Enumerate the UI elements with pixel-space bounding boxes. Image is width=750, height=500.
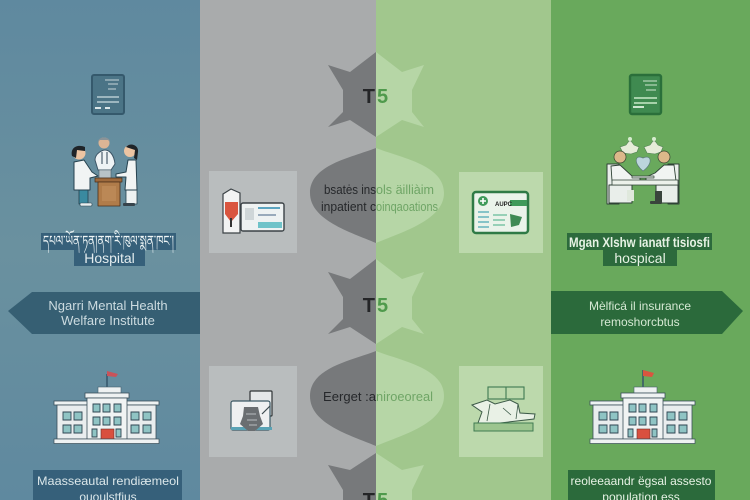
- icon: left document: [92, 75, 124, 114]
- icon: medical staff at podium: [72, 138, 138, 206]
- text: inpatient conditions: bsatės ins: [324, 183, 376, 197]
- panel: left blue column: [0, 0, 200, 500]
- heading: right hospital label: Mgan Xlshw ianatf tisiosfi: [569, 234, 710, 250]
- caption: left bottom label: [33, 470, 182, 500]
- caption: left bottom label: Maasseautal rendiæmeol: [37, 474, 179, 488]
- text: inpatient conditions: ols äilliàim: [376, 183, 434, 197]
- panel: right green column: [551, 0, 750, 500]
- card: patient on bed icon: [459, 366, 543, 457]
- text: inpatient conditions: [321, 183, 438, 214]
- caption: right bottom label: [568, 470, 715, 500]
- label: T5 top: T: [363, 86, 375, 108]
- panel: centre-right light green column: [376, 0, 551, 500]
- text: eerget: Eerget :a: [323, 390, 376, 404]
- heading: left hospital label: དཔལ་ཡོན་ཏན།ནག་རི་ཁུལ་སྨན་ཁང་།: [43, 229, 174, 254]
- icon: right hospital building: [590, 370, 695, 444]
- label: T5 top: [363, 86, 388, 108]
- text: inpatient conditions: oinqaoations: [376, 200, 438, 214]
- heading: right hospital label: [567, 233, 712, 266]
- text: inpatient conditions: inpatient c: [321, 200, 376, 214]
- card: document and mask icon: [209, 366, 297, 457]
- label: T5 bottom: [363, 490, 388, 500]
- arrow banner: medical insurance: Mèlficá il insurance: [589, 299, 691, 313]
- icon: right document: [630, 75, 661, 114]
- arrow banner: medical insurance: [551, 291, 743, 334]
- heading: right hospital label: hospical: [614, 250, 666, 266]
- card: insurance card icon: AUPC: [495, 202, 513, 208]
- arrow banner: medical insurance: remoshorcbtus: [600, 315, 680, 329]
- icon: left hospital building: [54, 371, 159, 444]
- label: T5 top: 5: [377, 86, 388, 108]
- arrow banner: Ngari Mental Health Welfare Institute: [8, 292, 200, 334]
- arrow banner: Ngari Mental Health Welfare Institute: Welfare Institute: [61, 313, 155, 328]
- card: medical record icon: [209, 171, 297, 253]
- text: eerget: niroeoreal: [376, 390, 433, 404]
- centre shapes: stars and blobs: [310, 52, 444, 500]
- panel: centre-left gray column: [200, 0, 376, 500]
- icon: consultation across table: [607, 137, 679, 204]
- heading: left hospital label: [41, 229, 176, 266]
- label: T5 middle: T: [363, 295, 375, 317]
- card: insurance card icon: [459, 172, 543, 253]
- label: T5 middle: [363, 295, 388, 317]
- arrow banner: Ngari Mental Health Welfare Institute: Ngarri Mental Health: [48, 298, 168, 313]
- caption: right bottom label: reoleeaandr ëgsal assesto: [570, 474, 712, 488]
- heading: left hospital label: Hospital: [84, 250, 135, 266]
- label: T5 middle: 5: [377, 295, 388, 317]
- text: eerget: [323, 390, 433, 404]
